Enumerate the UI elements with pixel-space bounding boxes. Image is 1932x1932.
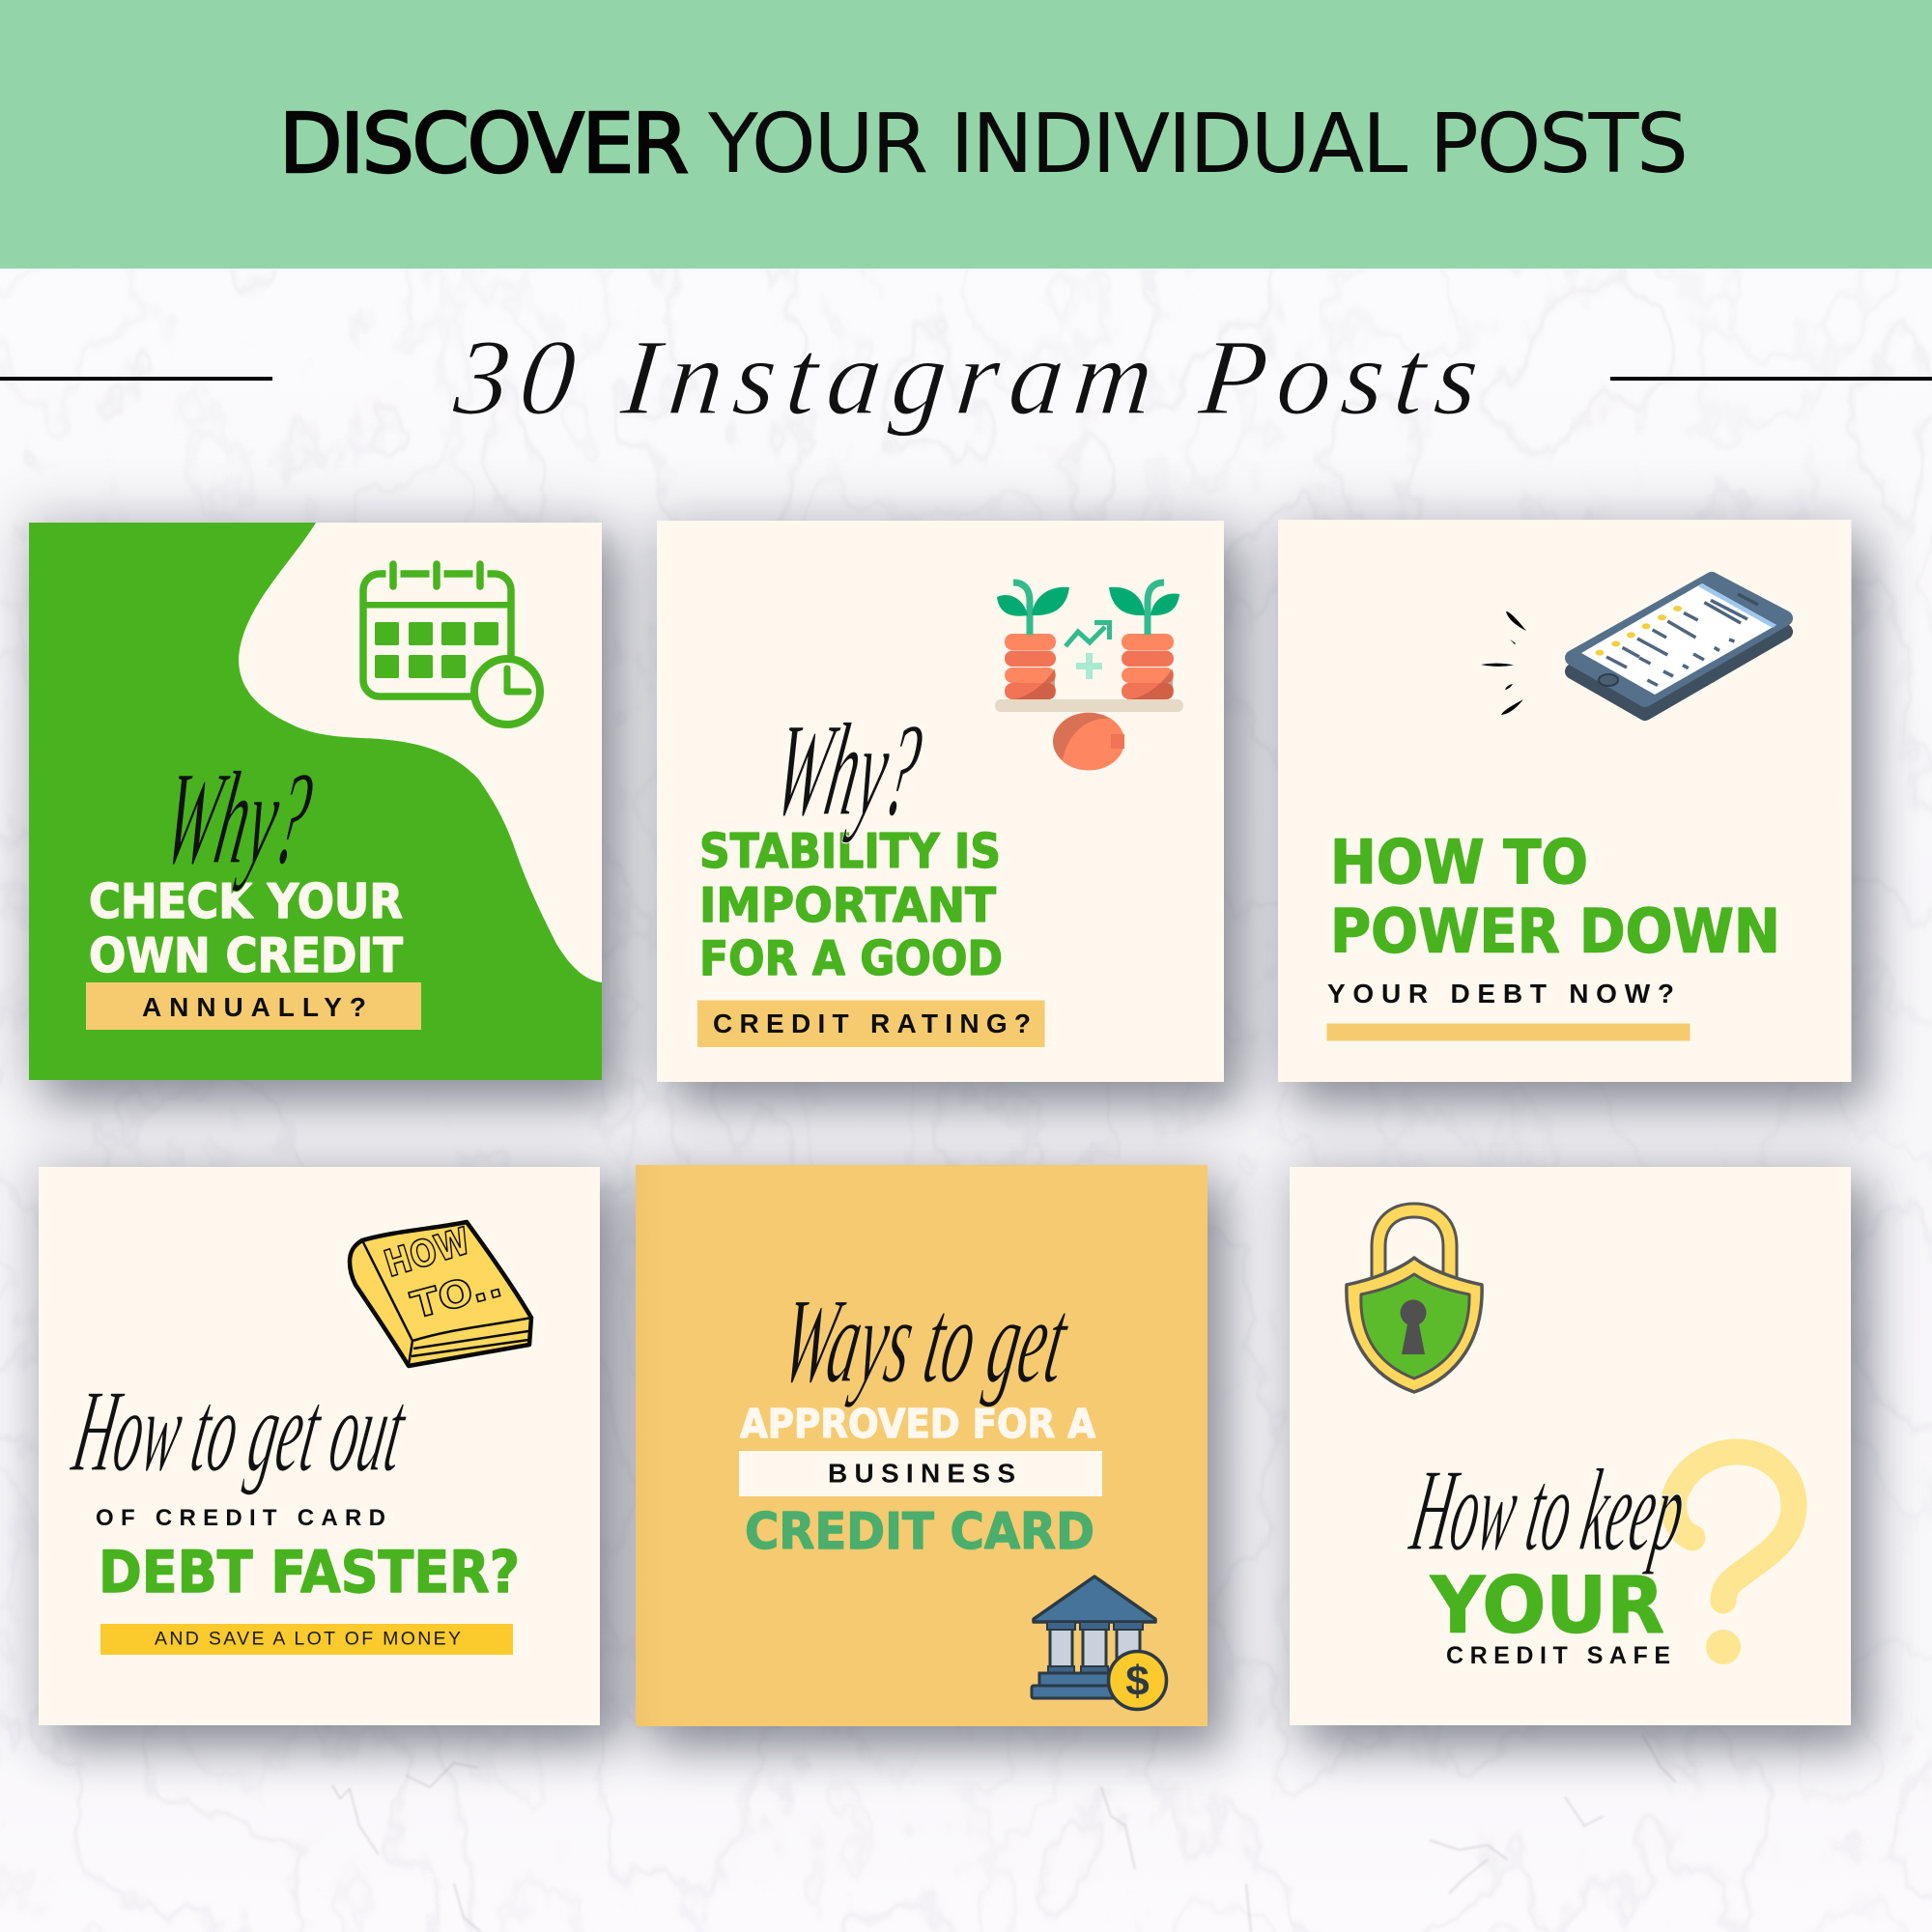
panel: debt faster bbox=[39, 1167, 600, 1725]
icon: how-to book bbox=[350, 1219, 531, 1366]
bar text: CREDIT RATING? bbox=[713, 1009, 1031, 1038]
card background bbox=[1290, 1167, 1851, 1725]
heading: DEBT FASTER? bbox=[99, 1539, 520, 1606]
heading bbox=[699, 824, 1003, 986]
highlight bar bbox=[1327, 1024, 1690, 1041]
icon: bank with dollar coin bbox=[1032, 1577, 1167, 1710]
script: why: Why? bbox=[155, 745, 322, 893]
heading: OWN CREDIT bbox=[89, 928, 404, 983]
heading bbox=[89, 874, 404, 983]
card background bbox=[29, 523, 602, 1080]
icon: bank with dollar coin: $ bbox=[1125, 1658, 1150, 1705]
subheading: OF CREDIT CARD bbox=[96, 1505, 385, 1531]
highlight bar bbox=[100, 1624, 513, 1655]
bar text: AND SAVE A LOT OF MONEY bbox=[155, 1629, 461, 1650]
highlight bar bbox=[739, 1451, 1102, 1496]
script: ways to get: Ways to get bbox=[773, 1274, 1078, 1408]
icon: burst lines bbox=[1481, 611, 1526, 715]
icon: calendar with clock bbox=[363, 564, 540, 724]
icon: coins and plants on balance bbox=[995, 582, 1183, 771]
panel: stability bbox=[657, 521, 1224, 1082]
heading: CHECK YOUR bbox=[89, 874, 403, 929]
title: YOUR INDIVIDUAL POSTS bbox=[707, 97, 1689, 192]
card background bbox=[39, 1167, 600, 1725]
icon: isometric phone bbox=[1573, 580, 1785, 713]
icon: question mark bbox=[1674, 1452, 1794, 1664]
divider left bbox=[0, 377, 272, 381]
heading: POWER DOWN bbox=[1330, 896, 1780, 966]
subtitle: 30 Instagram Posts bbox=[448, 318, 1484, 438]
heading: STABILITY IS bbox=[699, 824, 1001, 879]
heading: HOW TO bbox=[1330, 827, 1588, 897]
card background bbox=[636, 1165, 1208, 1726]
card background bbox=[657, 521, 1224, 1082]
icon: how-to book: TO.. bbox=[407, 1263, 506, 1327]
script: why: Why? bbox=[765, 696, 931, 844]
heading: YOUR bbox=[1430, 1561, 1664, 1650]
title bbox=[279, 97, 1689, 192]
card shadows bbox=[21, 512, 1869, 1750]
card background bbox=[1278, 520, 1851, 1082]
subheading: YOUR DEBT NOW? bbox=[1327, 979, 1674, 1009]
green blob bbox=[29, 523, 602, 1080]
heading: IMPORTANT bbox=[699, 878, 997, 933]
divider right bbox=[1610, 377, 1932, 381]
bar text: BUSINESS bbox=[828, 1459, 1015, 1488]
highlight bar bbox=[86, 982, 421, 1030]
subheading: CREDIT SAFE bbox=[1446, 1642, 1670, 1669]
heading: credit card: CREDIT CARD bbox=[745, 1503, 1094, 1561]
icon: how-to book: HOW bbox=[380, 1219, 475, 1286]
title: DISCOVER bbox=[279, 97, 689, 192]
heading bbox=[1330, 827, 1780, 966]
bar text: ANNUALLY? bbox=[142, 992, 366, 1022]
panel: debt faster: How to get out bbox=[64, 1365, 416, 1496]
panel: business credit card bbox=[636, 1165, 1208, 1726]
icon: padlock shield bbox=[1347, 1210, 1482, 1392]
panel: power down bbox=[1278, 520, 1851, 1082]
header band bbox=[0, 0, 1932, 269]
heading: FOR A GOOD bbox=[699, 931, 1003, 986]
highlight bar bbox=[697, 1001, 1045, 1047]
panel: keep your credit safe bbox=[1290, 1167, 1851, 1725]
heading: approved: APPROVED FOR A bbox=[740, 1401, 1095, 1447]
panel: check your own credit bbox=[29, 523, 602, 1080]
